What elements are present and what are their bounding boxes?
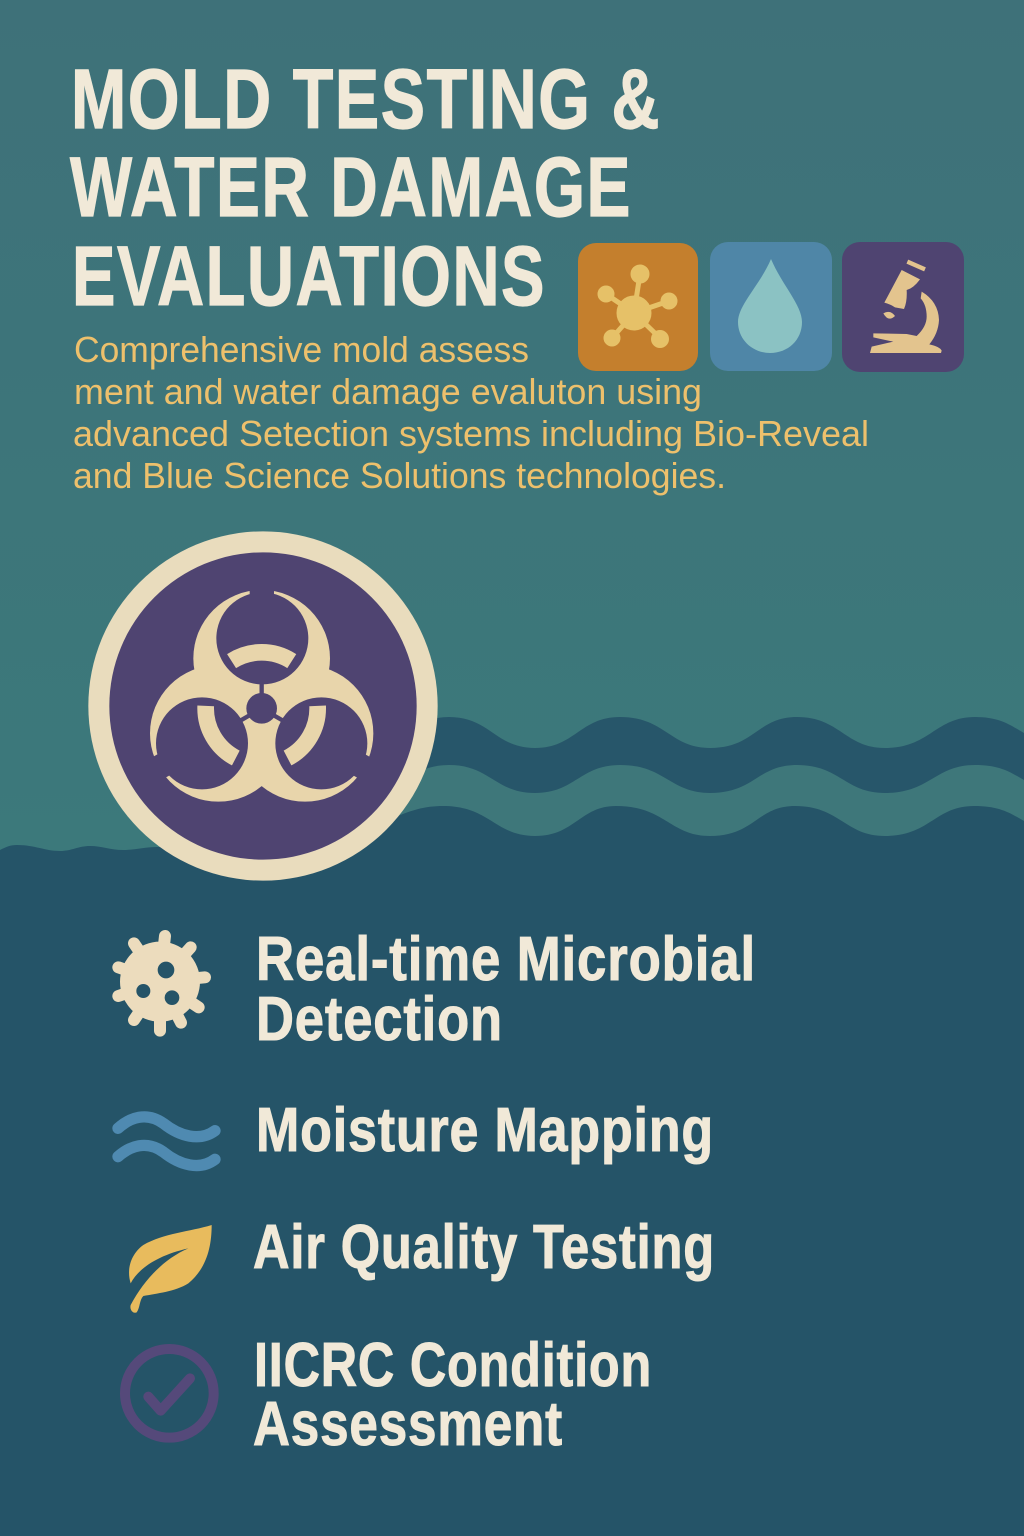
icon: leaf [129,1225,212,1313]
title [70,52,661,323]
label: Detection [256,985,503,1054]
wave layers [0,717,1024,1536]
icon: waves [118,1117,215,1166]
list item 2: moisture mapping [118,1096,714,1166]
icon: check circle [125,1349,214,1438]
subtitle text block: ment and water damage evaluton using [74,371,702,412]
subtitle text block [73,329,869,496]
title: MOLD TESTING & [71,52,661,146]
title: WATER DAMAGE [70,140,632,234]
list item 3: air quality testing [129,1213,715,1313]
label: Assessment [253,1390,563,1459]
label: Real-time Microbial [256,925,756,994]
label [256,925,756,1054]
icon: virus [118,936,205,1031]
label: IICRC Condition [254,1331,652,1400]
label: Air Quality Testing [253,1213,715,1282]
biohazard emblem [88,531,438,881]
title: EVALUATIONS [72,229,546,323]
label [253,1331,652,1459]
subtitle text block: and Blue Science Solutions technologies. [73,455,726,496]
icon tile: microscope [842,242,964,372]
label: Moisture Mapping [256,1096,714,1165]
icon tile: molecule [578,243,698,371]
subtitle text block: advanced Setection systems including Bio-Reveal [73,413,869,454]
subtitle text block: Comprehensive mold assess [74,329,529,370]
list item 1: microbial detection [118,925,756,1054]
list item 4: IICRC condition assessment [125,1331,652,1459]
icon tile: water drop [710,242,832,371]
